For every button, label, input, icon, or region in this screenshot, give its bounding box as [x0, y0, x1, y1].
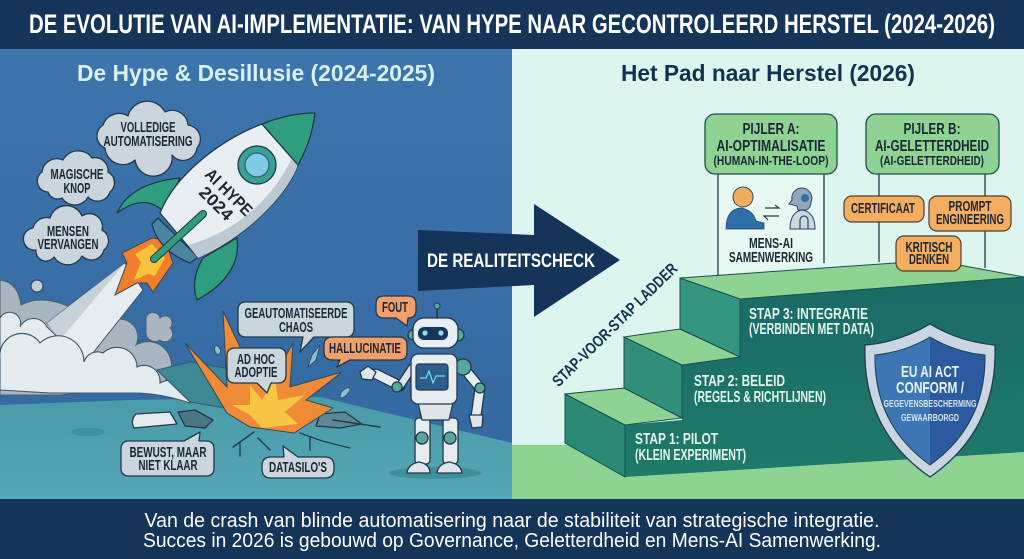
- bubble: fout: FOUT: [382, 300, 408, 316]
- bubble: bewust maar niet klaar: BEWUST, MAAR: [130, 445, 207, 461]
- window: [238, 146, 276, 184]
- thought cloud: volledige automatisering: [97, 101, 200, 176]
- smoke cloud: [0, 263, 190, 403]
- heading: herstel: Het Pad naar Herstel (2026): [621, 60, 915, 86]
- step 2 label: [694, 373, 826, 406]
- fin: front: [195, 238, 238, 300]
- panel: de hype en desillusie: [0, 49, 512, 499]
- rocket body: [160, 124, 298, 258]
- robot torso: [418, 403, 453, 420]
- pillar A header: [705, 114, 837, 174]
- footer bar: [0, 499, 1024, 559]
- pillar: B: [844, 114, 1011, 271]
- bubble: ad hoc adoptie: ADOPTIE: [234, 365, 278, 381]
- pillar B header: AI-GELETTERDHEID: [875, 138, 989, 155]
- step 1 block: [565, 394, 625, 477]
- bubble: fout: [376, 296, 416, 326]
- rubble and broken rocket part: [71, 362, 362, 436]
- fin: back: [117, 178, 180, 213]
- bubble: datasilo's: [262, 446, 334, 478]
- bubble: ad hoc adoptie: AD HOC: [237, 352, 275, 368]
- step 3 block: [680, 278, 740, 357]
- robot arm left: [376, 374, 400, 386]
- bubble: bewust maar niet klaar: NIET KLAAR: [138, 458, 198, 474]
- heading: hype: De Hype & Desillusie (2024-2025): [77, 60, 435, 86]
- pillar: A: MENS-AI: [749, 236, 793, 252]
- bubble: hallucinatie: HALLUCINATIE: [329, 341, 401, 357]
- bubble: geautomatiseerde chaos: CHAOS: [279, 320, 313, 336]
- bubble: hallucinatie: [324, 337, 407, 367]
- thought cloud: magische knop: KNOP: [64, 181, 91, 197]
- explosion: [185, 311, 380, 456]
- fin: middle: [154, 214, 203, 259]
- tag: kritisch denken: DENKEN: [909, 252, 949, 268]
- pillar: A: SAMENWERKING: [729, 250, 813, 266]
- footer text: Van de crash van blinde automatisering naar de stabiliteit van strategische integratie.: [144, 510, 880, 532]
- nozzle: [152, 218, 198, 263]
- pillar A header: PIJLER A:: [742, 121, 800, 138]
- step 2 label: STAP 2: BELEID: [694, 373, 785, 390]
- header bar: [0, 0, 1024, 49]
- pillar A columns: [718, 174, 824, 275]
- shield: eu ai act: CONFORM /: [896, 380, 964, 397]
- shield: eu ai act: EU AI ACT: [901, 364, 959, 381]
- thought cloud: volledige automatisering: AUTOMATISERING: [104, 134, 192, 150]
- bubble: bewust maar niet klaar: [121, 432, 214, 476]
- stairs: [565, 263, 1024, 477]
- step 3 label: STAP 3: INTEGRATIE: [749, 306, 868, 323]
- thought cloud: mensen vervangen: VERVANGEN: [38, 237, 98, 253]
- icon: human ai collaboration: [726, 187, 815, 229]
- rocket label: [189, 165, 256, 232]
- step 1 label: STAP 1: PILOT: [635, 431, 718, 448]
- thought cloud: magische knop: [37, 151, 114, 205]
- panel: het pad naar herstel: [512, 49, 1024, 499]
- robot: [360, 303, 485, 479]
- pillar A header: AI-OPTIMALISATIE: [716, 138, 826, 155]
- arrow: de realiteitscheck: DE REALITEITSCHECK: [427, 251, 595, 272]
- ground: [0, 397, 512, 499]
- bubble: geautomatiseerde chaos: GEAUTOMATISEERDE: [244, 306, 348, 322]
- pillar B columns: [879, 174, 985, 268]
- thought cloud: mensen vervangen: [23, 206, 108, 265]
- tag: kritisch denken: [896, 236, 961, 271]
- robot arm right: [463, 367, 480, 416]
- bubble: ad hoc adoptie: [227, 348, 286, 393]
- rocket: [115, 113, 315, 300]
- pillar: A: [705, 114, 837, 275]
- step 1 label: [635, 431, 746, 464]
- bubble: datasilo's: DATASILO'S: [269, 460, 327, 476]
- robot head: [436, 308, 438, 318]
- pillar B header: [866, 114, 999, 174]
- tag: certificaat: CERTIFICAAT: [851, 201, 915, 217]
- footer text: [143, 510, 881, 552]
- stair base: [625, 277, 1024, 477]
- step 2 block: [624, 337, 682, 418]
- ground cracks: [233, 420, 380, 456]
- tag: certificaat: [844, 196, 924, 222]
- step 3 label: [749, 306, 874, 338]
- shield: eu ai act: GEGEVENSBESCHERMING: [884, 399, 977, 410]
- nose cone: [262, 113, 315, 165]
- rocket label: AI HYPE: [201, 165, 256, 220]
- shield: eu ai act: GEWAARBORGD: [901, 413, 959, 424]
- pillar B header: PIJLER B:: [904, 121, 960, 138]
- pillar B header: (AI-GELETTERDHEID): [880, 153, 984, 168]
- rocket label: 2024: [195, 183, 237, 225]
- thought cloud: volledige automatisering: VOLLEDIGE: [120, 120, 176, 136]
- footer text: Succes in 2026 is gebouwd op Governance, Geletterdheid en Mens-AI Samenwerking.: [143, 530, 881, 552]
- flame: [115, 238, 173, 295]
- step 2 label: (REGELS & RICHTLIJNEN): [694, 389, 826, 406]
- ladder label: STAP-VOOR-STAP LADDER: [549, 260, 681, 390]
- tag: kritisch denken: KRITISCH: [906, 240, 952, 256]
- thought cloud: mensen vervangen: MENSEN: [47, 224, 89, 240]
- pillar A header: (HUMAN-IN-THE-LOOP): [714, 153, 828, 168]
- thought cloud: magische knop: MAGISCHE: [50, 167, 104, 183]
- arrow: de realiteitscheck: [418, 204, 620, 317]
- step 1 label: (KLEIN EXPERIMENT): [635, 447, 746, 464]
- tag: prompt engineering: [929, 196, 1011, 231]
- bubble: geautomatiseerde chaos: [238, 302, 354, 352]
- tag: prompt engineering: PROMPT: [948, 199, 992, 215]
- step 3 label: (VERBINDEN MET DATA): [749, 321, 874, 338]
- ground right: [512, 445, 1024, 499]
- robot legs: [415, 418, 430, 464]
- shield: eu ai act: [865, 324, 995, 477]
